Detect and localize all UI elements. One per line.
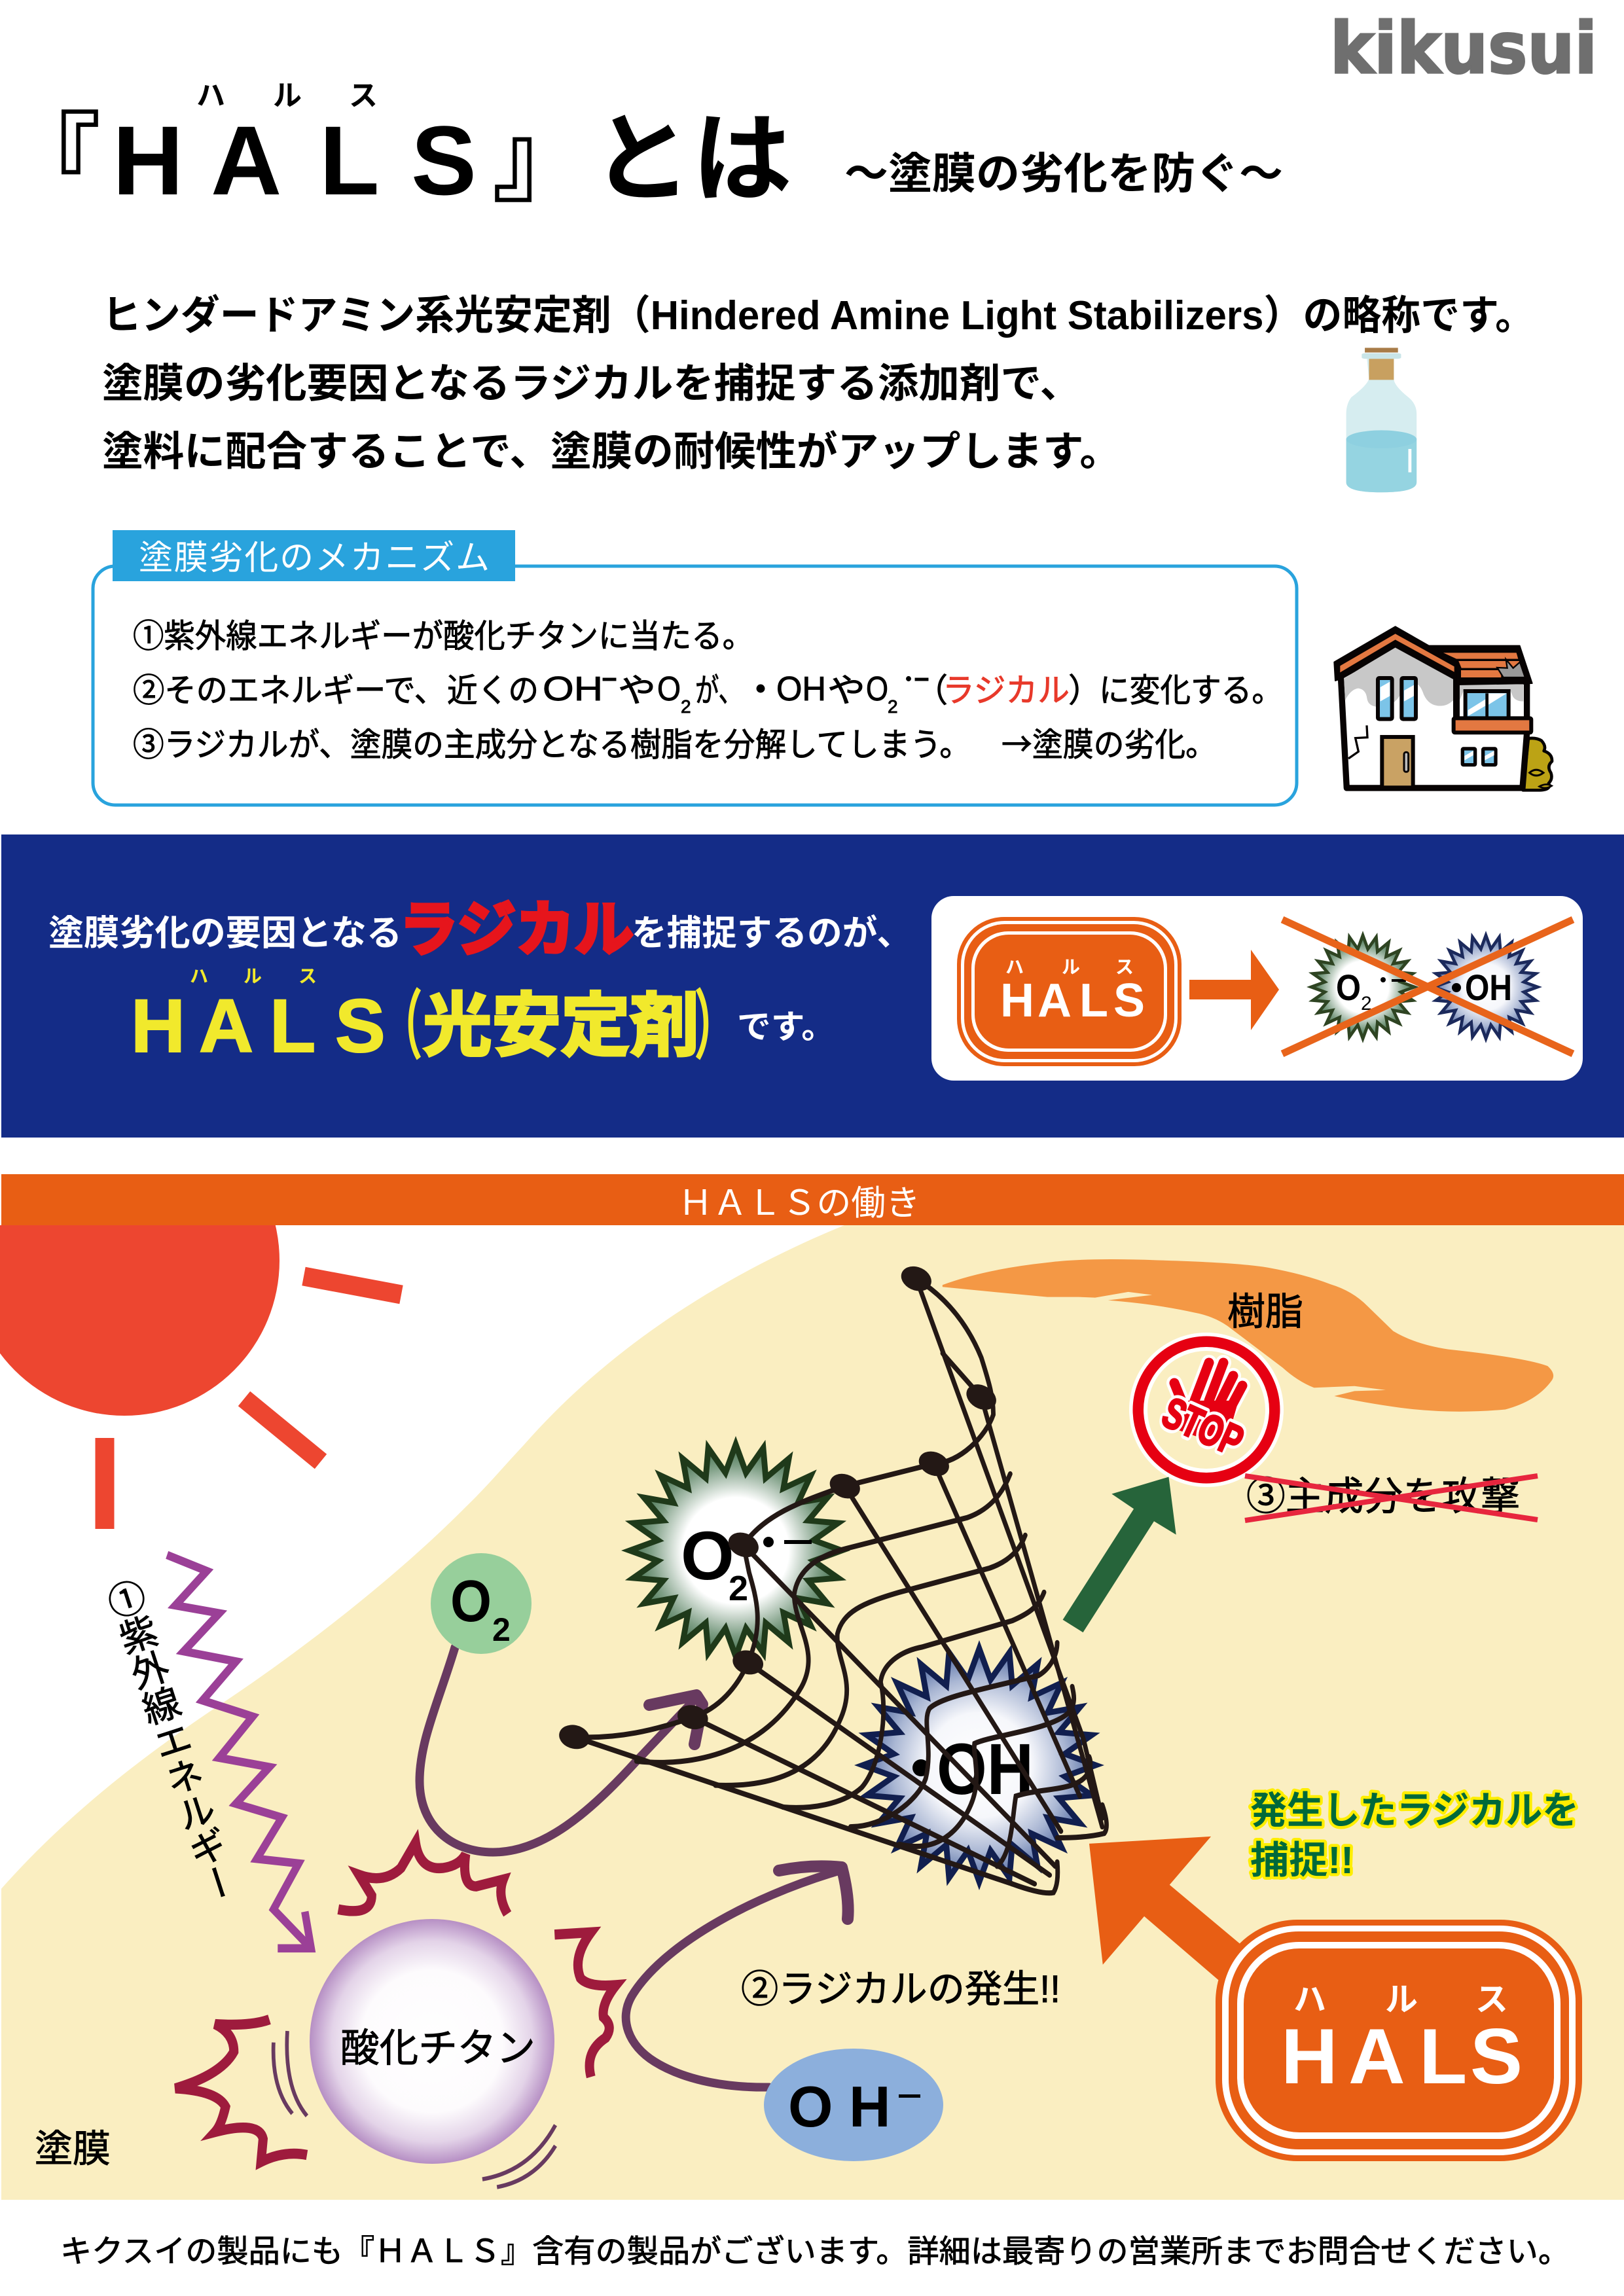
header bar bbox=[1, 1174, 1624, 1225]
panel: HALS function diagram bbox=[0, 1105, 1624, 2200]
header bar: ＨＡＬＳの働き bbox=[678, 1184, 920, 1223]
title block bbox=[3, 80, 1283, 215]
O2 circle: O bbox=[450, 1569, 492, 1634]
big orange arrow bbox=[1089, 1837, 1263, 1992]
O2 radical burst: O bbox=[681, 1518, 734, 1594]
mechanism step 1: ①紫外線エネルギーが酸化チタンに当たる。 bbox=[133, 618, 753, 655]
mechanism step 3: →塗膜の劣化。 bbox=[1001, 719, 1216, 766]
mechanism step 3 bbox=[133, 719, 1216, 766]
banner ruby: ハルス bbox=[190, 966, 317, 986]
green arrow bbox=[1063, 1477, 1176, 1632]
logo: kikusui: kikusui bbox=[1330, 8, 1597, 90]
banner line 1: 塗膜劣化の要因となる bbox=[48, 914, 402, 953]
title: 『HALS』とは: 』 bbox=[492, 104, 590, 214]
banner line 1: ラジカル bbox=[399, 897, 634, 963]
arrow: OH- to radical bbox=[626, 1866, 848, 2087]
stop sign: STOP bbox=[1155, 1388, 1251, 1465]
motion lines bbox=[274, 2031, 556, 2187]
title: 『HALS』とは: とは bbox=[592, 104, 792, 214]
UV energy zigzag arrow bbox=[167, 1555, 311, 1948]
titanium oxide sphere: 酸化チタン bbox=[340, 2026, 535, 2070]
banner line 2: HALS (光安定剤): ） bbox=[694, 984, 737, 1069]
mechanism step 2: 2 bbox=[681, 696, 691, 717]
title: 『HALS』とは bbox=[3, 104, 792, 215]
capture callout: 捕捉!! bbox=[1250, 1839, 1354, 1882]
big HALS badge bbox=[1216, 1920, 1582, 2161]
subtitle: ～塗膜の劣化を防ぐ～ bbox=[844, 149, 1283, 198]
mechanism step 2: OH bbox=[543, 670, 603, 708]
banner line 1 bbox=[48, 897, 912, 963]
intro text block bbox=[102, 293, 1534, 475]
panel: mechanism bbox=[93, 530, 1297, 805]
label: coating: 塗膜 bbox=[35, 2128, 111, 2170]
mechanism step 2: 2 bbox=[888, 696, 898, 717]
label: resin: 樹脂 bbox=[1227, 1291, 1303, 1333]
small HALS badge: ハルス bbox=[1005, 957, 1134, 977]
white panel bbox=[931, 896, 1583, 1081]
small HALS badge: HALS bbox=[1000, 975, 1145, 1027]
OH radical burst bbox=[863, 1649, 1096, 1882]
small HALS badge bbox=[957, 917, 1182, 1066]
mechanism step 2: 近くの bbox=[447, 672, 539, 709]
heading tab: 塗膜劣化のメカニズム bbox=[139, 539, 490, 577]
mechanism step 2: ） bbox=[1068, 672, 1101, 709]
mechanism step 2: O bbox=[657, 670, 681, 708]
O2 radical burst: 2 bbox=[729, 1569, 748, 1608]
big HALS badge: HALS bbox=[1281, 2013, 1523, 2100]
title: 『HALS』とは: HALS bbox=[113, 105, 477, 215]
mechanism step 2: ラジカル bbox=[943, 672, 1070, 709]
stop sign bbox=[1129, 1333, 1284, 1487]
OH- ellipse bbox=[764, 2049, 943, 2161]
cream coating background bbox=[1, 1225, 1624, 2200]
mechanism step 2: や bbox=[618, 672, 656, 709]
capture callout bbox=[1250, 1789, 1579, 1882]
icon: sun bbox=[0, 1225, 403, 1529]
stop sign: STOP bbox=[1155, 1388, 1251, 1465]
label: radical generation: ②ラジカルの発生!! bbox=[741, 1968, 1060, 2011]
panel: blue banner bbox=[1, 834, 1624, 1138]
banner line 2: HALS (光安定剤) bbox=[131, 984, 737, 1069]
mechanism step 2: O bbox=[866, 670, 888, 708]
mechanism step 2: ②そのエネルギーで、 bbox=[133, 672, 446, 709]
titanium oxide sphere bbox=[310, 1919, 554, 2164]
radical icons crossed out: 2 bbox=[1361, 993, 1372, 1014]
banner line 2: HALS (光安定剤): 光安定剤 bbox=[423, 988, 699, 1065]
big HALS badge: ハルス bbox=[1293, 1981, 1508, 2018]
mechanism step 2: に変化する。 bbox=[1099, 672, 1282, 709]
label: attack crossed out: ③主成分を攻撃 bbox=[1246, 1475, 1520, 1518]
arrow: O2 to radical bbox=[420, 1647, 702, 1852]
OH radical burst: OH bbox=[937, 1729, 1034, 1810]
radical icons crossed out: O bbox=[1336, 967, 1361, 1008]
OH- ellipse: OH bbox=[788, 2074, 891, 2139]
mechanism step 3: ③ラジカルが、塗膜の主成分となる樹脂を分解してしまう。 bbox=[133, 726, 971, 763]
intro text block: 塗膜の劣化要因となるラジカルを捕捉する添加剤で、 bbox=[102, 361, 1081, 406]
heading tab bbox=[113, 530, 515, 581]
footer note: キクスイの製品にも『ＨＡＬＳ』含有の製品がございます。詳細は最寄りの営業所までお問合せください。 bbox=[60, 2234, 1570, 2269]
mechanism step 2: が、 bbox=[695, 672, 742, 709]
arrow bbox=[1189, 950, 1279, 1030]
mechanism step 2: （ bbox=[915, 672, 948, 709]
mechanism step 2: OH bbox=[776, 670, 826, 708]
intro text block: 塗料に配合することで、塗膜の耐候性がアップします。 bbox=[102, 429, 1121, 475]
banner line 2: HALS (光安定剤): HALS bbox=[131, 984, 386, 1068]
radical icons crossed out: OH bbox=[1465, 967, 1512, 1008]
title: 『HALS』とは: 『 bbox=[3, 104, 101, 214]
banner line 2: HALS (光安定剤): （ bbox=[380, 984, 423, 1069]
banner suffix: です。 bbox=[737, 1009, 835, 1045]
O2 circle bbox=[431, 1553, 532, 1654]
icon: bottle bbox=[1346, 348, 1416, 492]
intro text block: ヒンダードアミン系光安定剤（Hindered Amine Light Stabilizers）の略称です。 bbox=[102, 293, 1534, 338]
O2 circle: 2 bbox=[492, 1611, 511, 1648]
capture callout: 発生したラジカルを bbox=[1250, 1789, 1579, 1832]
radical icons crossed out bbox=[1282, 920, 1573, 1054]
capture net bbox=[558, 1263, 1107, 1893]
burst marks bbox=[175, 1843, 616, 2162]
white area above coating bbox=[0, 1225, 844, 1890]
UV energy label: ①紫外線エネルギー bbox=[98, 1575, 242, 1908]
mechanism step 2 bbox=[133, 670, 1282, 717]
title ruby: ハルス: ハルス bbox=[196, 80, 378, 112]
banner line 1: を捕捉するのが、 bbox=[632, 914, 912, 953]
icon: worn house bbox=[1334, 626, 1552, 790]
O2 radical burst bbox=[630, 1444, 842, 1657]
resin shape bbox=[943, 1259, 1553, 1412]
mechanism step 2: や bbox=[827, 672, 865, 709]
